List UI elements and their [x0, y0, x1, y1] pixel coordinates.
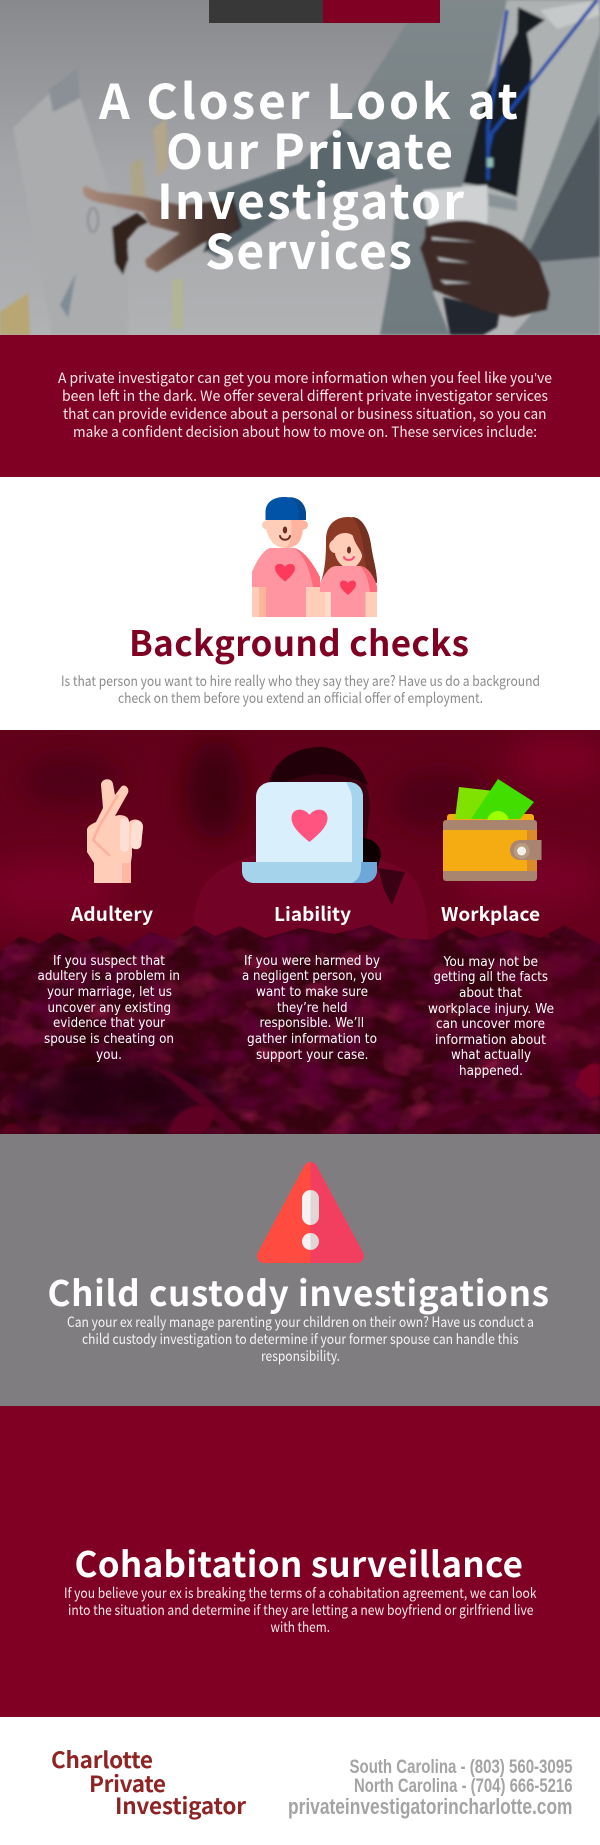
adultery text: adultery is a problem in [38, 969, 180, 984]
liability text: gather information to [247, 1032, 377, 1047]
shirt [433, 0, 600, 300]
pointing hand [83, 187, 240, 272]
title: Investigator [157, 163, 464, 233]
workplace text: workplace injury. We [428, 1002, 554, 1017]
body text [61, 671, 540, 708]
body text: child custody investigation to determine if your former spouse can handle this [82, 1329, 519, 1349]
panel: intro [0, 335, 600, 477]
adultery text: spouse is cheating on [44, 1032, 174, 1047]
hero photo background [0, 0, 600, 335]
workplace text: You may not be [443, 955, 538, 970]
adultery text: If you suspect that [53, 954, 165, 969]
body text: with them. [270, 1617, 330, 1637]
heading: cohabitation: Cohabitation surveillance [74, 1537, 523, 1588]
icon: warning triangle [264, 1169, 357, 1256]
person [194, 855, 428, 940]
title: Our Private [166, 113, 453, 183]
logo: Investigator [115, 1789, 246, 1821]
background photo [0, 730, 600, 1134]
body text [64, 1583, 537, 1637]
title: A Closer Look at [98, 63, 518, 133]
liability text [242, 954, 382, 1063]
intro text: been left in the dark. We offer several different private investigator services [62, 385, 548, 406]
column headings: Liability [274, 900, 351, 927]
column headings [70, 900, 540, 927]
logo [51, 1743, 246, 1821]
body text: If you believe your ex is breaking the terms of a cohabitation agreement, we can look [64, 1583, 537, 1603]
panel: child custody [0, 1134, 600, 1406]
workplace text: information about [435, 1033, 546, 1048]
liability text: responsible. We’ll [260, 1016, 364, 1031]
icon: couple [252, 497, 377, 617]
icon: laptop with heart [242, 782, 377, 883]
liability text: a negligent person, you [242, 969, 382, 984]
foliage [0, 920, 600, 1134]
body text: responsibility. [261, 1346, 340, 1366]
body text: check on them before you extend an official offer of employment. [118, 688, 483, 708]
icon: crossed fingers [87, 779, 143, 883]
cup [422, 182, 490, 228]
adultery text: you. [96, 1048, 122, 1063]
jacket body [340, 0, 507, 335]
heading: child custody investigations: Child custody investigations [48, 1266, 549, 1317]
intro text: A private investigator can get you more information when you feel like you’ve [58, 367, 552, 388]
cuff [203, 197, 242, 253]
jacket arm [205, 127, 397, 257]
column headings: Adultery [70, 900, 153, 927]
top tab crimson [323, 0, 440, 23]
adultery text: your marriage, let us [47, 985, 172, 1000]
workplace text: what actually [451, 1048, 531, 1063]
body text [67, 1312, 534, 1366]
title [98, 63, 518, 283]
body text: Can your ex really manage parenting your children on their own? Have us conduct a [67, 1312, 534, 1332]
badge [487, 193, 517, 211]
logo: Private [89, 1767, 166, 1799]
intro text: make a confident decision about how to move on. These services include: [73, 421, 537, 442]
logo: Charlotte [51, 1743, 153, 1775]
heading: background checks: Background checks [129, 616, 469, 667]
lanyard [488, 0, 597, 180]
intro text [58, 367, 552, 442]
top tab dark [209, 0, 323, 23]
adultery text: uncover any existing [48, 1001, 171, 1016]
intro text: that can provide evidence about a personal or business situation, so you can [63, 403, 546, 424]
column headings: Workplace [441, 900, 540, 927]
icon: wallet with cash [443, 779, 542, 881]
liability text: they’re held [277, 1001, 348, 1016]
panel: footer [0, 1717, 600, 1845]
adultery text: evidence that your [53, 1016, 166, 1031]
panel: adultery liability workplace [0, 730, 600, 1134]
adultery text [38, 954, 180, 1063]
workplace text: getting all the facts [434, 970, 548, 985]
panel: background checks [0, 477, 600, 730]
right jacket [520, 33, 600, 262]
workplace text: can uncover more [436, 1017, 545, 1032]
board paper [14, 94, 129, 275]
liability text: If you were harmed by [244, 954, 380, 969]
tie [463, 7, 545, 197]
workplace text: happened. [459, 1064, 523, 1079]
body text: into the situation and determine if they are letting a new boyfriend or girlfriend live [68, 1600, 534, 1620]
workplace text: about that [459, 986, 522, 1001]
liability text: want to make sure [256, 985, 368, 1000]
body text: Is that person you want to hire really who they say they are? Have us do a background [61, 671, 540, 691]
workplace text [428, 955, 554, 1079]
title: Services [205, 213, 412, 283]
liability text: support your case. [256, 1048, 368, 1063]
hand right [420, 220, 550, 317]
panel: cohabitation surveillance [0, 1406, 600, 1717]
contact details [288, 1757, 573, 1819]
